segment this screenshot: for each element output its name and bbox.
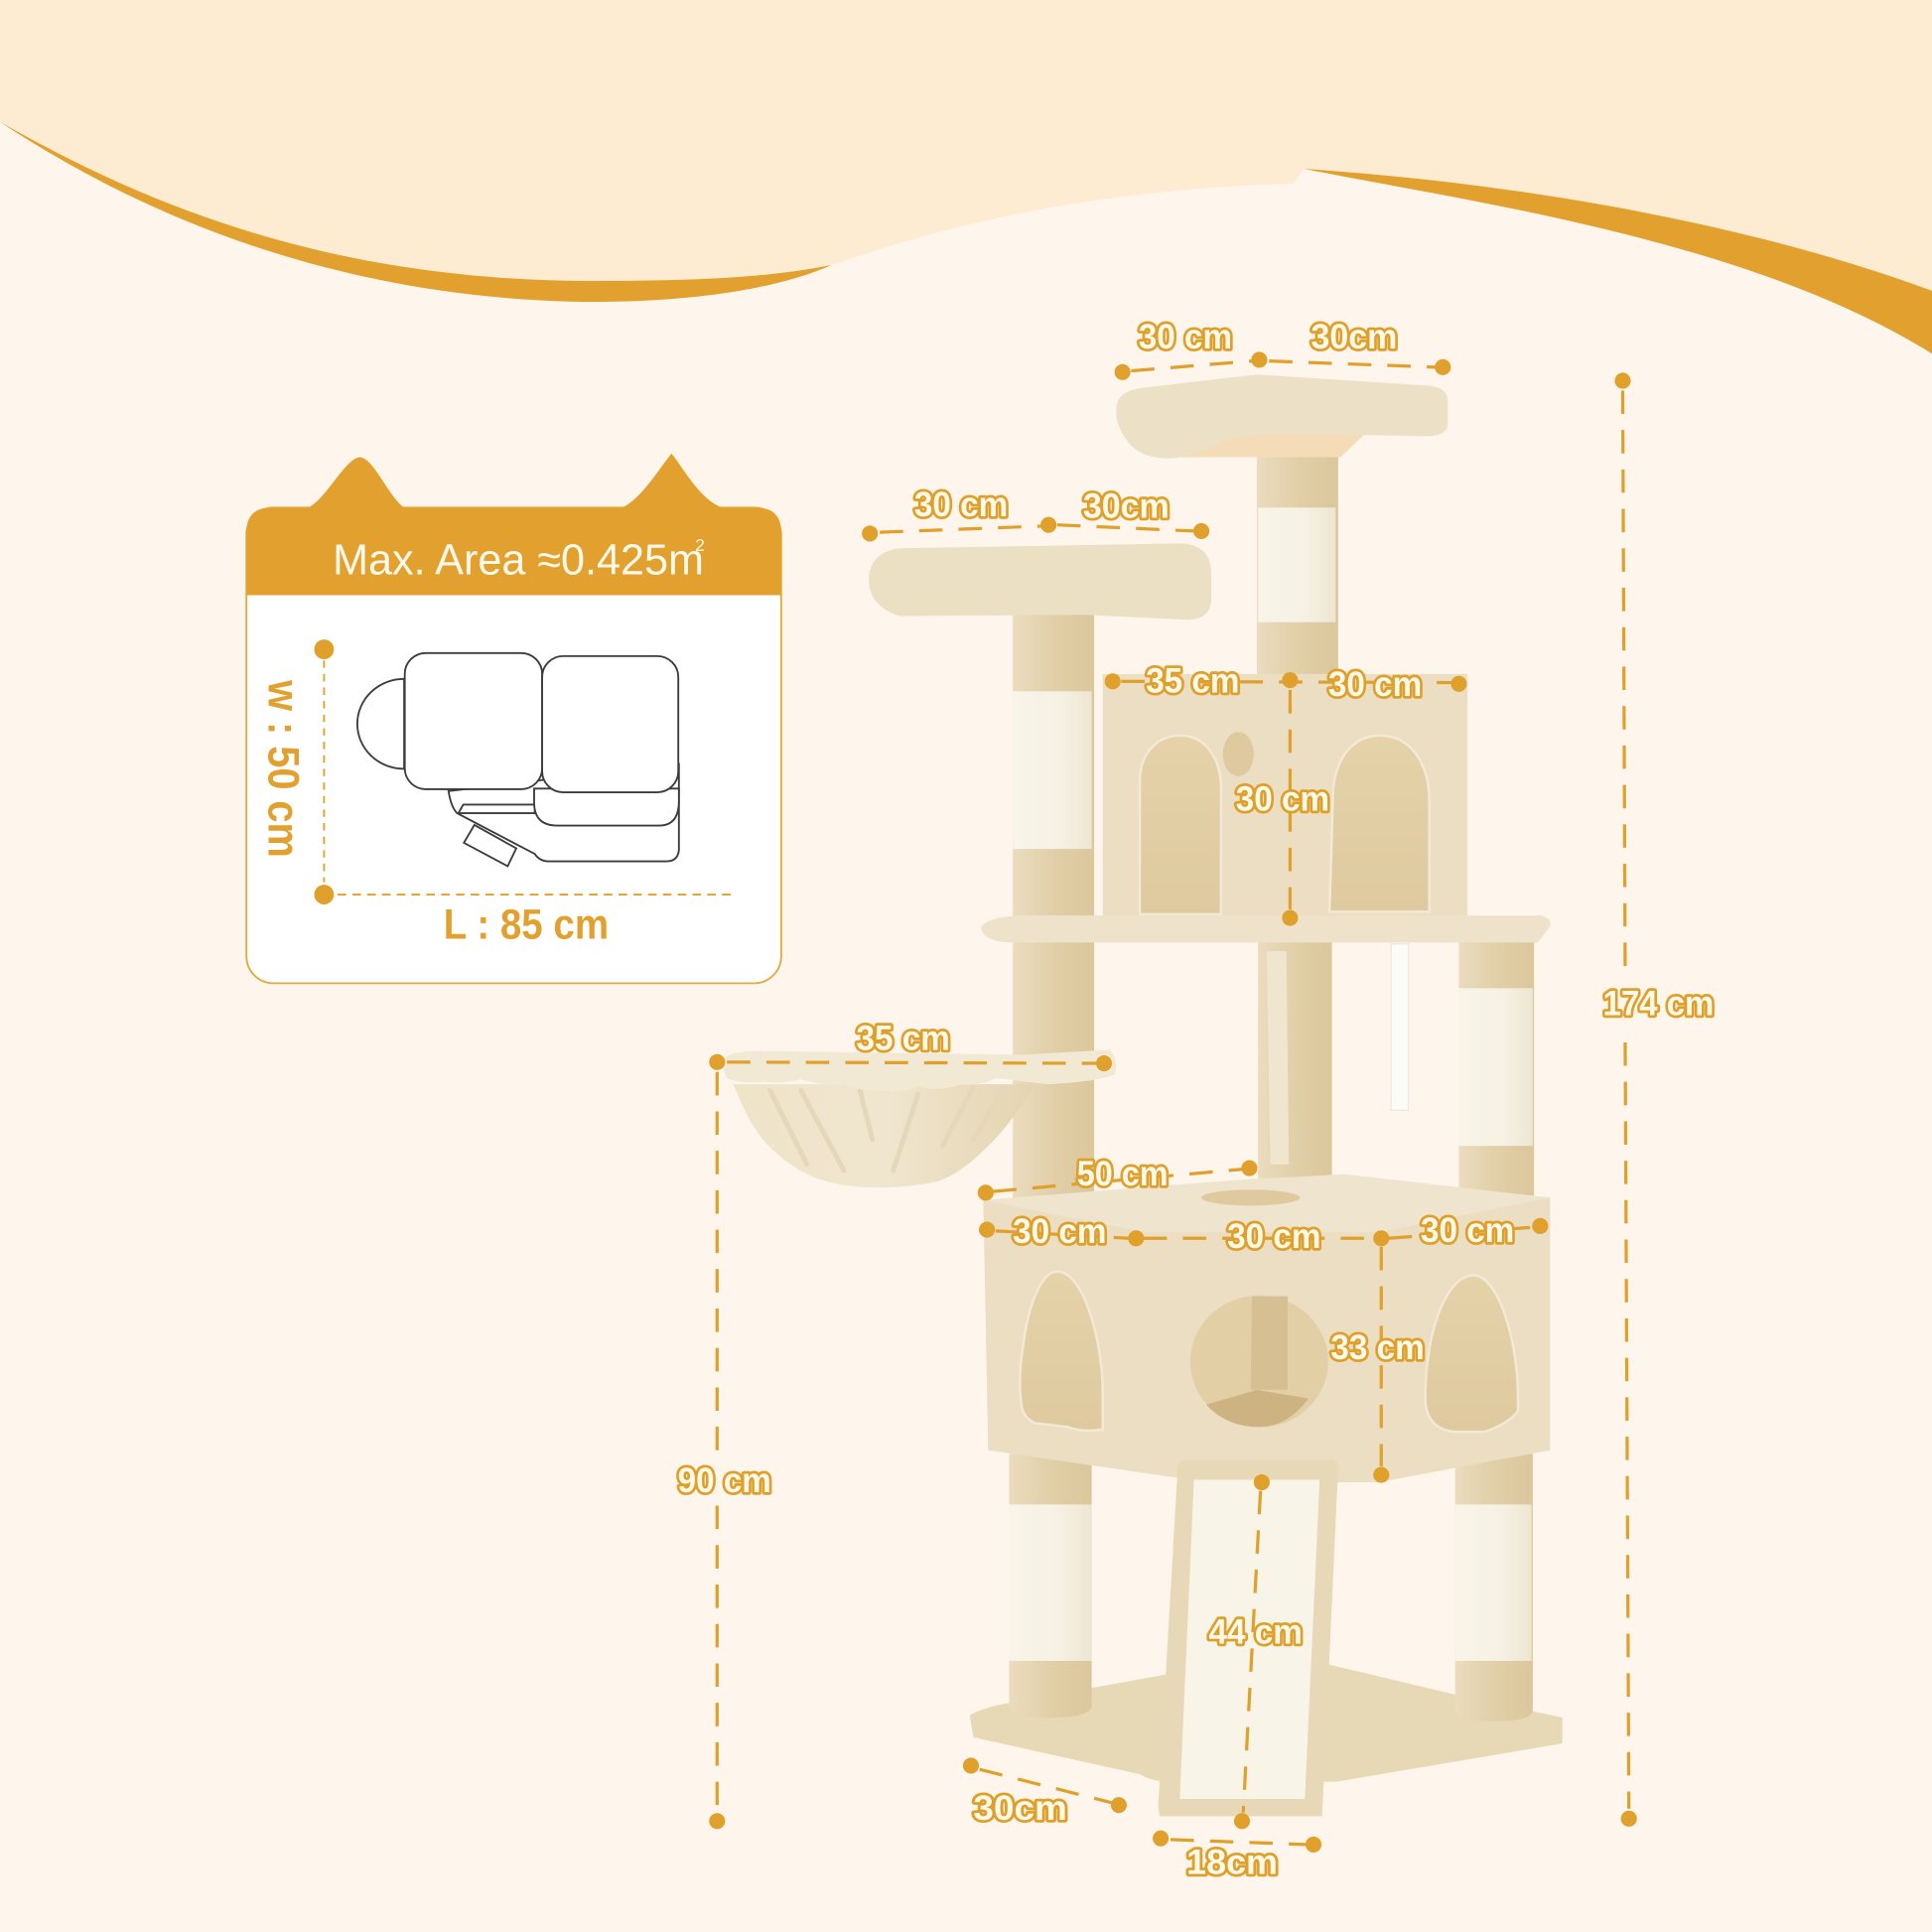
header text: Max. Area ≈0.425m xyxy=(333,536,706,584)
cat tree xyxy=(722,374,1563,1816)
scratching ramp xyxy=(1159,1460,1338,1816)
middle shelf xyxy=(981,915,1551,942)
top post xyxy=(1257,444,1338,678)
dimension: top perch width xyxy=(1115,319,1450,380)
label: 30cm xyxy=(1311,319,1397,356)
dimension: hammock xyxy=(678,1020,1112,1829)
label: 30 cm xyxy=(1139,319,1232,356)
label: 30cm xyxy=(973,1790,1067,1828)
panel: max area xyxy=(246,454,781,983)
lower house xyxy=(983,1174,1550,1482)
dimension: ramp length xyxy=(1208,1474,1303,1829)
orange swoosh right xyxy=(1304,169,1932,353)
small round hole xyxy=(1223,732,1254,776)
panel header with cat ears xyxy=(246,454,781,595)
hammock rim xyxy=(722,1049,1116,1092)
sisal panel xyxy=(1179,1480,1319,1799)
upper house xyxy=(1103,674,1467,918)
label: 30cm xyxy=(1083,487,1170,525)
lower right post xyxy=(1455,1453,1533,1722)
label: 174 cm xyxy=(1603,986,1714,1024)
right arch opening xyxy=(1426,1276,1518,1432)
panel body xyxy=(246,507,781,983)
centre oval opening xyxy=(1190,1296,1328,1428)
left arch opening xyxy=(1020,1272,1103,1431)
label: 30 cm xyxy=(1236,781,1329,819)
left arch opening xyxy=(1140,736,1221,914)
dimension: lower house depth xyxy=(978,1156,1258,1200)
width label: w : 50 cm xyxy=(259,679,308,858)
dimension: total height xyxy=(1603,372,1714,1827)
left perch xyxy=(869,543,1211,620)
header text: 2 xyxy=(695,535,705,555)
middle tower post xyxy=(1258,939,1332,1185)
label: 50 cm xyxy=(1077,1156,1169,1193)
rope xyxy=(1267,951,1289,1165)
left post xyxy=(1013,610,1094,1213)
hammock folds xyxy=(770,1087,1004,1171)
base plate xyxy=(970,1665,1563,1782)
label: 30 cm xyxy=(1421,1212,1514,1250)
label: 30 cm xyxy=(1013,1213,1106,1251)
width dimension line xyxy=(314,639,735,904)
dimension: base side xyxy=(963,1757,1127,1828)
label: 18cm xyxy=(1186,1845,1278,1882)
label: 30 cm xyxy=(1227,1218,1320,1256)
label: 30 cm xyxy=(914,486,1008,524)
dimension: lower house width xyxy=(979,1212,1548,1483)
label: 33 cm xyxy=(1330,1329,1425,1367)
top face xyxy=(983,1174,1550,1232)
hammock bowl xyxy=(733,1084,1035,1187)
icon: top view of cat tree xyxy=(357,653,679,866)
label: 35 cm xyxy=(857,1020,950,1057)
orange swoosh left xyxy=(0,122,832,302)
top perch xyxy=(1116,374,1448,459)
length label: L : 85 cm xyxy=(444,901,609,948)
top hole xyxy=(1201,1189,1300,1205)
label: 35 cm xyxy=(1146,662,1240,700)
right arch opening xyxy=(1329,736,1430,911)
label: 44 cm xyxy=(1208,1614,1303,1652)
dimension: upper house xyxy=(1105,662,1466,926)
top wave banner xyxy=(0,0,1932,353)
hanging toy xyxy=(1391,944,1409,1110)
label: 30 cm xyxy=(1328,666,1422,704)
dimension: ramp width xyxy=(1153,1831,1321,1882)
label: 90 cm xyxy=(678,1462,771,1500)
right upper post xyxy=(1458,939,1534,1204)
hammock xyxy=(722,1049,1116,1187)
dimension: left perch width xyxy=(862,486,1209,541)
lower left post xyxy=(1009,1453,1092,1718)
